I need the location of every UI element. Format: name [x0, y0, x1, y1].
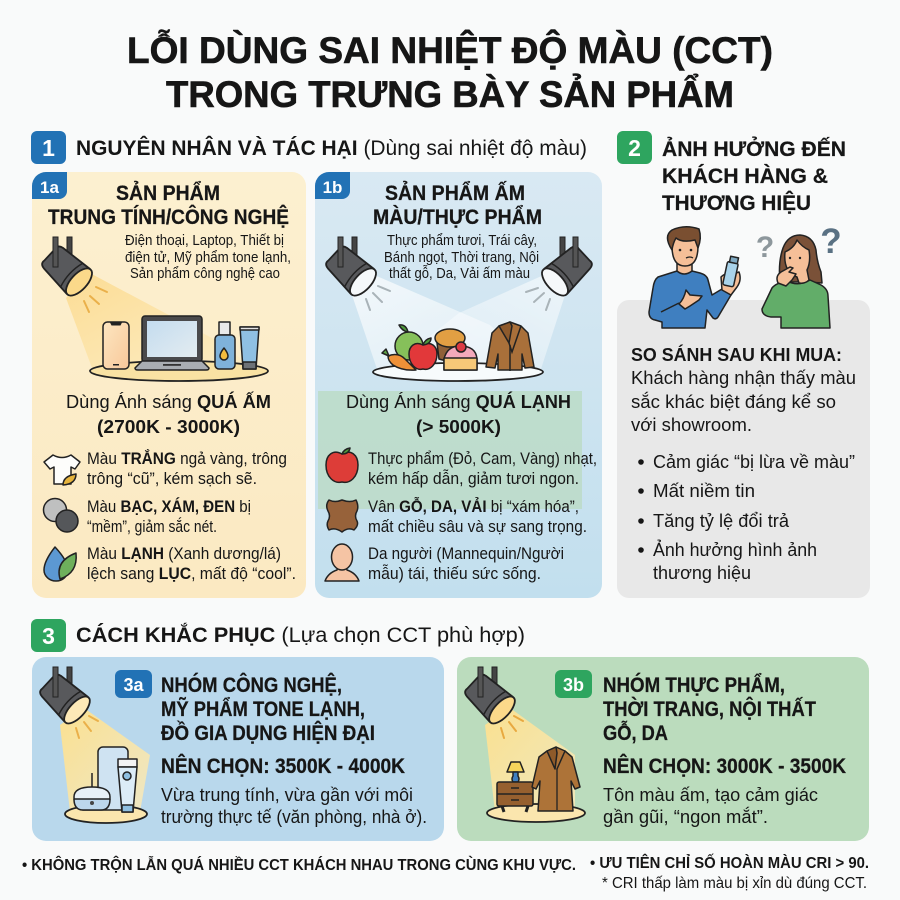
heading 3a	[161, 673, 375, 745]
icon: spotlight 3b	[461, 667, 523, 738]
item: food colours	[368, 450, 597, 488]
badge 1b: 1b	[323, 178, 342, 197]
panel 1b: cold light on warm products	[315, 172, 602, 598]
sweater	[762, 280, 830, 328]
face	[785, 240, 810, 283]
question mark grey: ?	[756, 231, 774, 264]
impact bullets: Tăng tỷ lệ đổi trả	[653, 510, 790, 531]
heading: section 3	[31, 619, 525, 652]
icon: spotlight warm	[38, 237, 107, 312]
impact bullets	[638, 451, 855, 583]
item: cool colours: lệch sang LỤC, mất độ “cool”.	[87, 565, 296, 583]
badge 1b	[315, 172, 350, 199]
footer note: CRI: * CRI thấp làm màu bị xỉn dù đúng CCT.	[602, 875, 867, 892]
footer note: do not mix CCT: • KHÔNG TRỘN LẪN QUÁ NHIỀU CCT KHÁCH NHAU TRONG CÙNG KHU VỰC.	[22, 855, 576, 874]
jacket	[486, 322, 534, 371]
item: wood leather fabric: Vân GỖ, DA, VẢI bị “xám hóa”,	[368, 497, 579, 516]
recommendation 3b: NÊN CHỌN: 3000K - 3500K	[603, 754, 846, 778]
heading 3b	[603, 673, 816, 745]
description 3a	[161, 785, 427, 827]
badge 3b	[555, 670, 592, 698]
heading: section 3: CÁCH KHẮC PHỤC (Lựa chọn CCT phù hợp)	[76, 622, 525, 647]
heading: section 2	[617, 131, 846, 215]
product list 1a: Điện thoại, Laptop, Thiết bị	[125, 233, 284, 249]
item: wood leather fabric	[368, 497, 587, 536]
green apple	[395, 325, 423, 360]
item: cool colours: Màu LẠNH (Xanh dương/lá)	[87, 545, 281, 563]
comparison text: SO SÁNH SAU KHI MUA:	[631, 344, 842, 365]
woman	[762, 235, 830, 328]
impact bullets: Mất niềm tin	[653, 480, 755, 501]
badge 1a	[32, 172, 67, 199]
item: white	[87, 449, 287, 488]
heading 1b: SẢN PHẨM ẤM	[385, 182, 525, 205]
heading 3a: MỸ PHẨM TONE LẠNH,	[161, 698, 365, 721]
heading: section 2: 2	[628, 135, 641, 161]
product list 1a	[125, 233, 291, 282]
heading: section 1: 1	[42, 135, 55, 161]
sweater	[649, 271, 731, 328]
heading: section 2: KHÁCH HÀNG &	[662, 165, 828, 188]
heading: section 1: NGUYÊN NHÂN VÀ TÁC HẠI (Dùng sai nhiệt độ màu)	[76, 135, 587, 160]
hair	[668, 227, 700, 250]
item: white: trông “cũ”, kém sạch sẽ.	[87, 470, 257, 488]
product list 1a: điện tử, Mỹ phẩm tone lạnh,	[125, 250, 291, 266]
red apple	[409, 338, 437, 369]
beam 3b	[485, 708, 575, 812]
impact bullets: Ảnh hưởng hình ảnh	[653, 539, 817, 560]
product list 1a: Sản phẩm công nghệ cao	[130, 266, 280, 282]
heading 3b: NHÓM THỰC PHẨM,	[603, 673, 785, 697]
heading 1b	[373, 182, 542, 229]
heading 1b: MÀU/THỰC PHẨM	[373, 206, 542, 229]
icon: leather hide	[327, 500, 358, 532]
title	[127, 29, 773, 115]
icon: water drop and leaf	[44, 547, 76, 581]
hand with bottle	[721, 272, 740, 295]
cold beams	[352, 274, 565, 372]
title: LỖI DÙNG SAI NHIỆT ĐỘ MÀU (CCT)	[127, 29, 773, 71]
panel 1a: warm light on neutral products	[32, 172, 306, 598]
item: skin: mẫu) tái, thiếu sức sống.	[368, 564, 541, 583]
impact bullets: Cảm giác “bị lừa về màu”	[653, 451, 855, 472]
recommendation 3a: NÊN CHỌN: 3500K - 4000K	[161, 754, 405, 778]
watermark band	[318, 391, 582, 509]
badge 3a: 3a	[123, 675, 144, 695]
statement 1a	[66, 391, 271, 437]
badge 3b: 3b	[563, 675, 584, 695]
beam 3a	[60, 708, 150, 812]
icon: person skin	[325, 544, 359, 581]
icon: spotlight left	[322, 237, 390, 310]
item: silver grey black: Màu BẠC, XÁM, ĐEN bị	[87, 497, 251, 516]
description 3a: trường thực tế (văn phòng, nhà ở).	[161, 807, 427, 827]
item: skin: Da người (Mannequin/Người	[368, 545, 564, 563]
item: cool colours	[87, 545, 296, 583]
item: silver grey black	[87, 497, 251, 536]
man	[649, 227, 740, 328]
face	[672, 234, 698, 266]
icon: modern appliances on table	[65, 747, 147, 823]
icon: tech products on table	[90, 316, 268, 381]
statement 1a: (2700K - 3000K)	[97, 416, 240, 437]
comparison text	[631, 344, 856, 435]
title: TRONG TRƯNG BÀY SẢN PHẨM	[166, 73, 734, 115]
icon: white t-shirt	[44, 455, 80, 485]
footer note: CRI: • ƯU TIÊN CHỈ SỐ HOÀN MÀU CRI > 90.	[590, 852, 869, 872]
hair	[779, 235, 822, 283]
icon: food and jacket on table	[373, 322, 543, 381]
warm beam	[66, 272, 255, 372]
heading 3b: THỜI TRANG, NỘI THẤT	[603, 697, 816, 721]
statement 1b	[346, 391, 571, 437]
statement 1b: (> 5000K)	[416, 416, 501, 437]
illustration: confused customers	[649, 222, 842, 328]
description 3a: Vừa trung tính, vừa gần với môi	[161, 785, 413, 805]
badge 1a: 1a	[40, 178, 59, 197]
panel 3b: food and fashion solution	[457, 657, 869, 841]
hand at mouth	[777, 267, 796, 286]
heading: section 2: ẢNH HƯỞNG ĐẾN	[662, 137, 846, 161]
statement 1b: Dùng Ánh sáng QUÁ LẠNH	[346, 391, 571, 412]
item: food colours: Thực phẩm (Đỏ, Cam, Vàng) nhạt,	[368, 450, 597, 468]
item: skin	[368, 545, 564, 583]
heading 3a: ĐỒ GIA DỤNG HIỆN ĐẠI	[161, 721, 375, 745]
item: silver grey black: “mềm”, giảm sắc nét.	[87, 517, 217, 536]
heading 1a: TRUNG TÍNH/CÔNG NGHỆ	[48, 205, 289, 229]
comparison text: sắc khác biệt đáng kể so	[631, 391, 836, 412]
description 3b	[603, 785, 818, 827]
description 3b: Tôn màu ấm, tạo cảm giác	[603, 785, 818, 805]
description 3b: gần gũi, “ngon mắt”.	[603, 806, 768, 827]
comparison text: Khách hàng nhận thấy màu	[631, 367, 856, 388]
muffin	[435, 329, 465, 362]
heading: section 3: 3	[42, 623, 55, 649]
icon: apple	[326, 448, 358, 482]
product list 1b: Bánh ngọt, Thời trang, Nội	[384, 250, 539, 266]
item: wood leather fabric: mất chiều sâu và sự sang trọng.	[368, 518, 587, 536]
heading: section 2: THƯƠNG HIỆU	[662, 191, 811, 215]
item: food colours: kém hấp dẫn, giảm tươi ngon.	[368, 469, 579, 488]
badge 3a	[115, 670, 152, 698]
panel 2: customer impact	[617, 300, 870, 598]
heading 3a: NHÓM CÔNG NGHỆ,	[161, 673, 342, 697]
panel 3a: tech group solution	[32, 657, 444, 841]
carrot	[382, 349, 416, 370]
hand on chest	[679, 290, 702, 309]
product list 1b: Thực phẩm tươi, Trái cây,	[387, 233, 537, 249]
icon: silver and black spheres	[44, 498, 78, 532]
heading 1a	[48, 182, 289, 229]
impact bullets: thương hiệu	[653, 562, 751, 583]
neck	[677, 262, 692, 274]
icon: nightstand, lamp and coat on rug	[487, 747, 585, 822]
icon: spotlight 3a	[36, 667, 98, 738]
heading 1a: SẢN PHẨM	[116, 182, 220, 205]
item: white: Màu TRẮNG ngả vàng, trông	[87, 449, 287, 468]
comparison text: với showroom.	[631, 414, 752, 435]
question mark dark: ?	[820, 222, 842, 261]
footer note: CRI	[590, 852, 869, 892]
heading 3b: GỖ, DA	[603, 721, 668, 745]
cake	[444, 342, 477, 370]
product list 1b	[384, 233, 539, 282]
icon: spotlight right	[526, 237, 596, 310]
heading: section 1	[31, 131, 587, 164]
product list 1b: thất gỗ, Da, Vải ấm màu	[389, 265, 530, 282]
statement 1a: Dùng Ánh sáng QUÁ ẤM	[66, 391, 271, 412]
